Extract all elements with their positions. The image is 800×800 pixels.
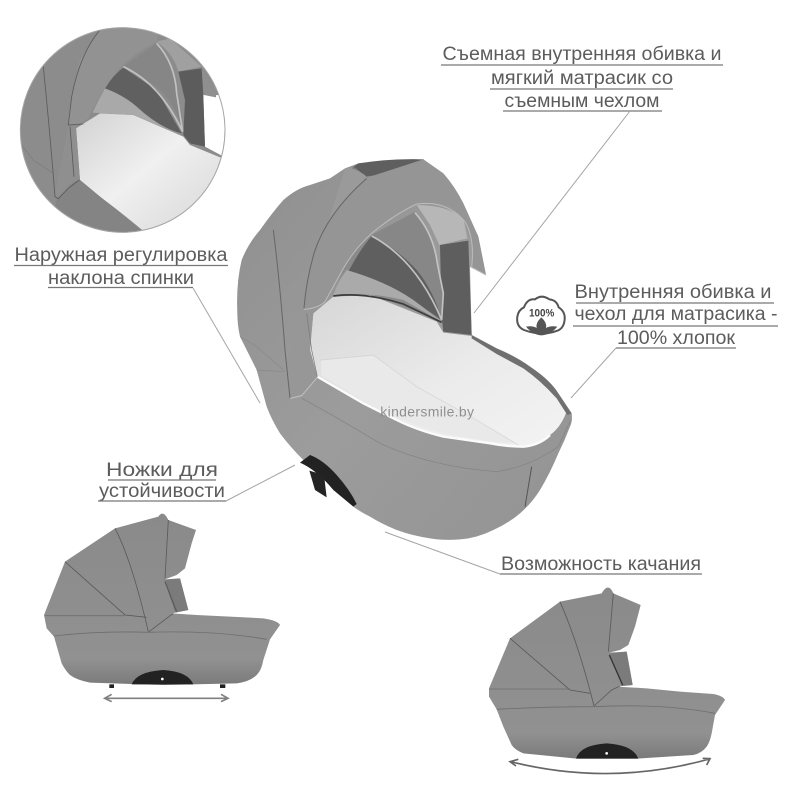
dark panel	[347, 236, 442, 320]
curved double arrow	[510, 758, 710, 774]
mattress floor	[321, 356, 517, 443]
mid panel	[372, 213, 443, 320]
base rocker	[576, 743, 638, 759]
straight double arrow	[105, 694, 228, 702]
inset: dark lining	[105, 68, 182, 133]
label: rocking	[385, 532, 702, 575]
handle	[352, 159, 424, 177]
inset: hood lip	[68, 26, 160, 125]
dark rim edge	[472, 335, 572, 415]
light lining	[417, 205, 467, 245]
cotton icon 100%: 100%	[529, 308, 555, 320]
side strip	[286, 312, 317, 398]
inset: mid panel	[124, 43, 183, 130]
dark post	[440, 241, 472, 335]
white mattress	[310, 295, 567, 447]
inset: lower rim	[80, 180, 142, 230]
base rocker	[132, 670, 193, 684]
hood lip	[303, 159, 486, 309]
hood inside base	[333, 212, 443, 322]
label: legs: устойчивости	[99, 481, 225, 502]
label: legs: Ножки для	[106, 460, 218, 481]
inset: top light band	[157, 38, 202, 72]
silhouette	[489, 587, 725, 759]
main carrycot	[237, 159, 572, 540]
inset: close-up of hood in circle	[18, 26, 230, 240]
label: rocking: Возможность качания	[501, 554, 701, 575]
label: cotton: 100% хлопок	[617, 328, 736, 349]
label: back adjustment: Наружная регулировка	[14, 245, 228, 266]
label: cotton	[571, 282, 778, 398]
label: legs	[98, 460, 295, 502]
label: removable upholstery: Съемная внутренняя обивка и	[442, 44, 722, 65]
legs bracket	[300, 455, 357, 507]
label: removable upholstery: съемным чехлом	[504, 91, 660, 112]
side view: rocking carrycot	[489, 587, 725, 774]
label: removable upholstery: мягкий матрасик со	[491, 68, 673, 89]
inset: side strip	[76, 128, 80, 179]
silhouette	[44, 514, 280, 685]
label: cotton: Внутренняя обивка и	[574, 282, 772, 303]
watermark: kindersmile.by	[380, 404, 474, 420]
side view: stable carrycot	[44, 514, 280, 702]
cotton icon 100%	[517, 297, 565, 335]
lower light lining	[333, 270, 442, 322]
rim lower seam	[302, 398, 571, 472]
inset: dark post	[178, 68, 205, 147]
label: back adjustment	[14, 245, 260, 403]
inset: white mattress	[76, 113, 221, 230]
label: cotton: чехол для матрасика -	[574, 304, 778, 325]
label: removable upholstery	[441, 44, 723, 313]
carrycot body	[237, 159, 572, 540]
label: back adjustment: наклона спинки	[48, 268, 194, 289]
inset: lower light lining	[93, 88, 182, 135]
hood top band light	[312, 167, 367, 273]
inset: right lip	[202, 68, 217, 97]
